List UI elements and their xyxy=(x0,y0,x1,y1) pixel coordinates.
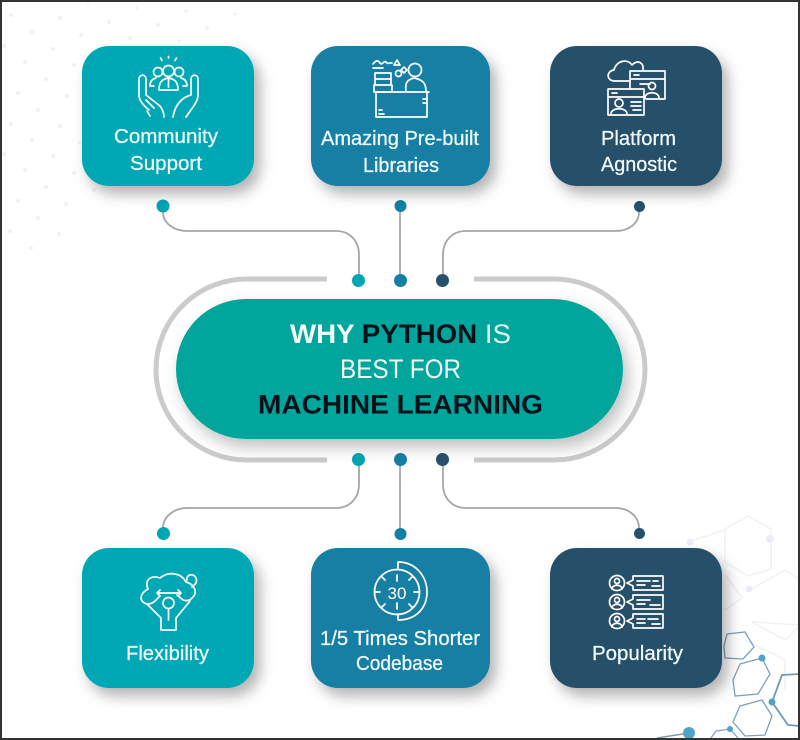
label: Flexibility xyxy=(126,643,209,665)
icon: cloud and browser windows xyxy=(608,61,665,115)
title text: BEST FOR xyxy=(340,354,461,384)
outer ring around title xyxy=(156,279,645,460)
connector lines: bottom xyxy=(163,465,639,534)
icon: hands holding people xyxy=(139,56,198,117)
icon: half stopwatch xyxy=(374,562,427,620)
connector lines: top xyxy=(163,205,639,274)
card: Community Support xyxy=(82,46,254,186)
label: 1/5 Times Shorter xyxy=(320,628,480,650)
central title pill xyxy=(176,299,623,439)
card: 1/5 Times Shorter Codebase: Codebase xyxy=(356,653,443,675)
connector dots: card ends xyxy=(156,200,645,540)
title text: WHY PYTHON IS xyxy=(290,319,511,349)
background hexagon network xyxy=(657,516,800,739)
icon: flexible brain figure xyxy=(141,574,197,630)
stopwatch number: 30 xyxy=(388,584,406,603)
label: Platform xyxy=(601,128,676,150)
label: Popularity xyxy=(592,643,683,665)
title text xyxy=(258,319,543,420)
card: Platform Agnostic: Agnostic xyxy=(601,154,677,176)
title text: MACHINE LEARNING xyxy=(258,390,543,420)
card: Amazing Pre-built Libraries xyxy=(311,46,490,186)
card: Amazing Pre-built Libraries: Libraries xyxy=(363,155,439,177)
connector dots: centre ends xyxy=(352,274,449,466)
icon: users with reviews xyxy=(610,576,663,628)
icon: desk with books and person xyxy=(373,60,429,117)
label: Amazing Pre-built xyxy=(321,128,479,150)
card: Community Support: Support xyxy=(130,153,202,175)
label: Community xyxy=(114,126,218,148)
card: Flexibility xyxy=(82,548,254,688)
card: Platform Agnostic xyxy=(550,46,722,186)
background dot pattern xyxy=(2,0,236,250)
card: 1/5 Times Shorter Codebase xyxy=(311,548,490,688)
card: Popularity xyxy=(550,548,722,688)
